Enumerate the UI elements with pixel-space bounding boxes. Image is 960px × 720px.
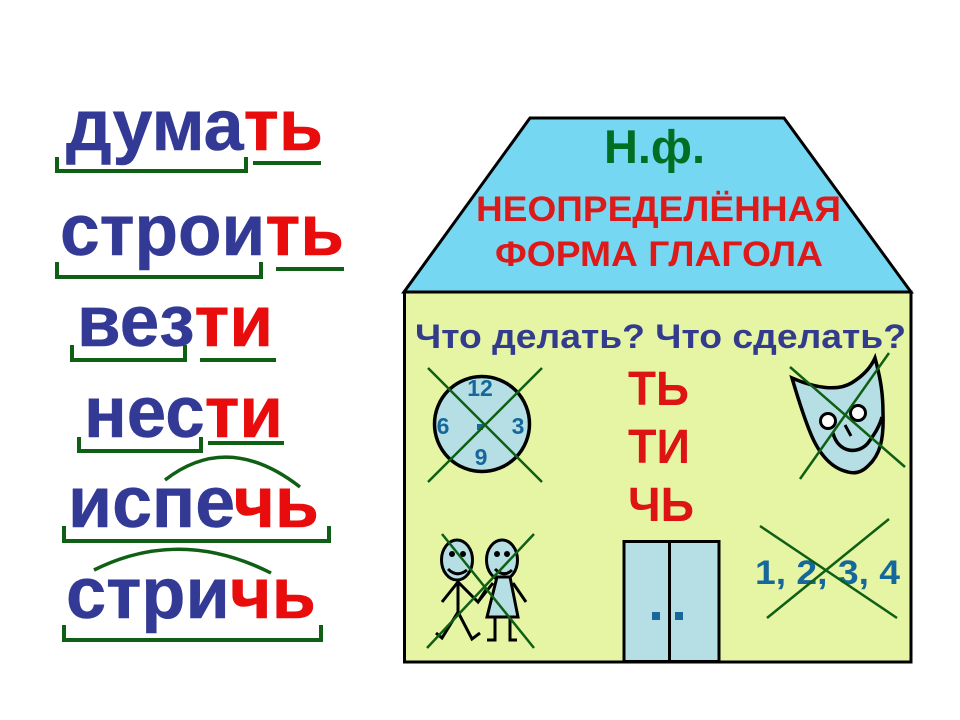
house roof — [404, 118, 911, 292]
icon: crossed clock: 9 — [475, 444, 487, 470]
house body — [404, 292, 911, 662]
suffix list — [628, 363, 694, 532]
icon: crossed clock: 12 — [467, 375, 493, 401]
word: думать: думать — [66, 86, 323, 166]
door — [624, 541, 719, 662]
icon: crossed clock: 3 — [512, 413, 524, 439]
icon: crossed children — [427, 534, 534, 648]
heading: неопределённая форма глагола: ФОРМА ГЛАГОЛА — [495, 235, 823, 274]
word: нести: нести — [84, 373, 283, 453]
suffix list: ЧЬ — [628, 479, 694, 532]
heading: неопределённая форма глагола — [476, 190, 841, 274]
icon: crossed numbers — [755, 519, 900, 618]
suffix list: ТИ — [628, 421, 690, 474]
word: испечь: испечь — [68, 463, 319, 543]
icon: crossed mask — [790, 353, 905, 479]
word: стричь: стричь — [66, 554, 316, 634]
word: везти: везти — [77, 282, 273, 362]
panel: house — [404, 118, 911, 662]
heading: Н.ф.: Н.ф. — [604, 121, 705, 174]
icon: crossed clock: 6 — [437, 413, 449, 439]
question text: Что делать? Что сделать? — [415, 318, 906, 356]
icon: crossed clock — [428, 368, 542, 482]
word: строить: строить — [60, 191, 344, 271]
suffix list: ТЬ — [628, 363, 689, 416]
heading: неопределённая форма глагола: НЕОПРЕДЕЛЁННАЯ — [476, 190, 841, 229]
icon: crossed numbers: 1, 2, 3, 4 — [755, 554, 900, 592]
